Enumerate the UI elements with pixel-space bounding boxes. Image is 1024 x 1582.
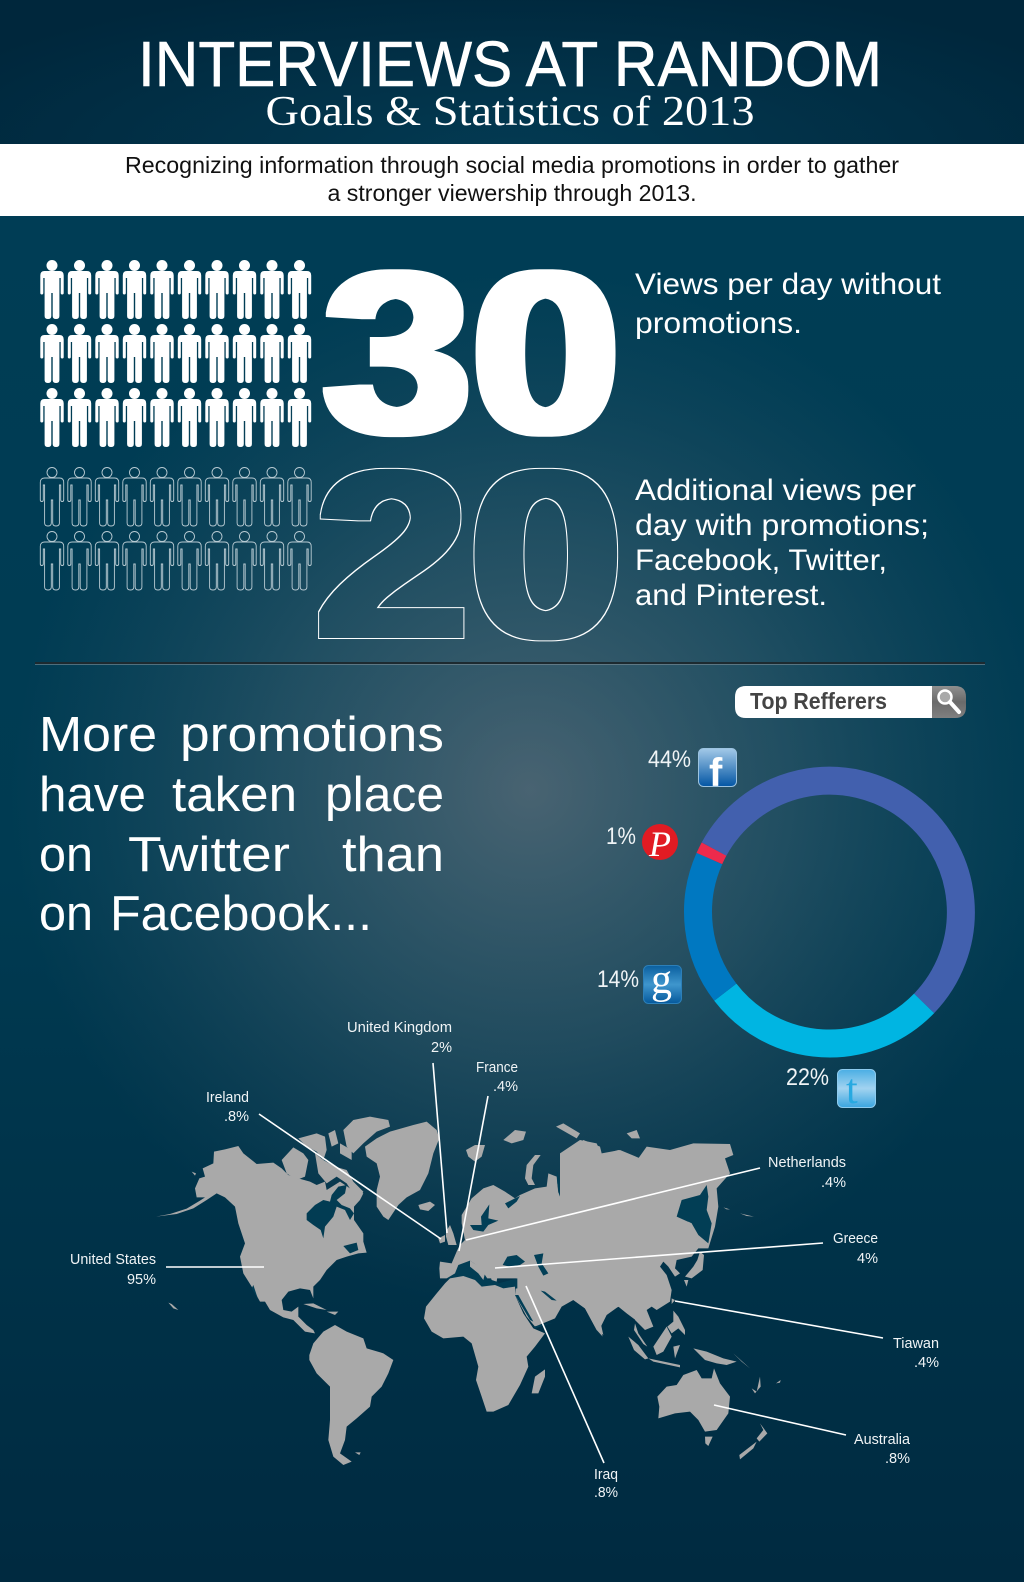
heading: more promotions: More <box>39 708 157 762</box>
text: additional views: Additional views per <box>635 474 916 507</box>
label: tiawan <box>893 1336 939 1371</box>
donut chart: top referrers <box>698 781 961 1044</box>
label: ireland: Ireland <box>206 1090 249 1106</box>
label: australia: Australia <box>854 1432 911 1448</box>
twitter 22%: 22% <box>786 1064 829 1091</box>
people icons: 30 filled <box>40 260 311 447</box>
map: east asia and oceania <box>560 1140 781 1459</box>
text: additional views: and Pinterest. <box>635 579 827 612</box>
world map <box>156 1117 781 1465</box>
text: additional views: day with promotions; <box>635 509 929 542</box>
label: netherlands: Netherlands <box>768 1155 846 1171</box>
big number 20 outlined: 20 <box>315 422 623 688</box>
label: netherlands: .4% <box>821 1175 846 1191</box>
label: greece: 4% <box>857 1251 878 1267</box>
heading: more promotions: Facebook... <box>110 887 372 941</box>
big number 30: 30 <box>323 224 620 482</box>
heading: more promotions: place <box>325 768 444 822</box>
label: iraq: Iraq <box>594 1467 618 1483</box>
map: europe, africa, west asia <box>424 1123 640 1412</box>
text: views without promotions: Views per day without <box>635 268 941 301</box>
heading: more promotions <box>39 708 444 941</box>
label: netherlands <box>768 1155 846 1191</box>
intro band: Recognizing information through social media promotions in order to gather <box>125 152 899 178</box>
label: ireland <box>206 1090 249 1125</box>
text: additional views: Facebook, Twitter, <box>635 544 887 577</box>
label: australia <box>854 1432 911 1467</box>
label: france: .4% <box>493 1079 518 1095</box>
text: additional views <box>635 474 929 612</box>
label: united states: 95% <box>127 1272 156 1288</box>
google 14%: 14% <box>597 966 639 993</box>
label: ireland: .8% <box>224 1109 249 1125</box>
heading: more promotions: promotions <box>180 708 444 762</box>
label: iraq <box>594 1467 618 1501</box>
label: greece: Greece <box>833 1231 878 1247</box>
label: united kingdom: United Kingdom <box>347 1020 452 1036</box>
title: INTERVIEWS AT RANDOM <box>138 28 882 100</box>
heading: more promotions: than <box>342 828 444 882</box>
icon: twitter: t <box>846 1067 858 1113</box>
header band <box>0 0 1024 144</box>
label: united states: United States <box>70 1252 156 1268</box>
label: united kingdom: 2% <box>431 1040 452 1056</box>
text: views without promotions <box>635 268 941 340</box>
heading: more promotions: have <box>39 768 146 822</box>
label: iraq: .8% <box>594 1485 618 1501</box>
label: france: France <box>476 1060 518 1076</box>
twitter 22% <box>786 1064 876 1113</box>
heading: more promotions: on <box>39 887 93 941</box>
pinterest 1% <box>606 823 678 864</box>
heading: more promotions: taken <box>172 768 297 822</box>
facebook 44%: 44% <box>648 746 691 773</box>
map: americas and greenland <box>156 1117 439 1465</box>
icon: pinterest: P <box>648 824 671 864</box>
text: views without promotions: promotions. <box>635 307 802 340</box>
intro band: a stronger viewership through 2013. <box>328 180 696 206</box>
heading: more promotions: on <box>39 828 93 882</box>
subtitle: Goals & Statistics of 2013 <box>266 89 754 135</box>
label: france <box>476 1060 518 1095</box>
label: tiawan: .4% <box>914 1355 939 1371</box>
label: united kingdom <box>347 1020 452 1056</box>
search box: top refferers <box>735 686 966 718</box>
people icons: 20 outlined <box>40 468 311 590</box>
label: united states <box>70 1252 156 1288</box>
intro band <box>0 144 1024 216</box>
google 14% <box>597 957 682 1004</box>
facebook 44% <box>648 746 736 795</box>
search box: top refferers: Top Refferers <box>750 688 887 714</box>
label: greece <box>833 1231 878 1267</box>
icon: google: g <box>651 957 672 1003</box>
pinterest 1%: 1% <box>606 823 636 850</box>
leader lines <box>166 1063 883 1463</box>
heading: more promotions: Twitter <box>128 828 290 882</box>
label: tiawan: Tiawan <box>893 1336 939 1352</box>
label: australia: .8% <box>885 1451 910 1467</box>
icon: facebook: f <box>709 751 723 795</box>
icon: magnifier <box>938 690 959 712</box>
